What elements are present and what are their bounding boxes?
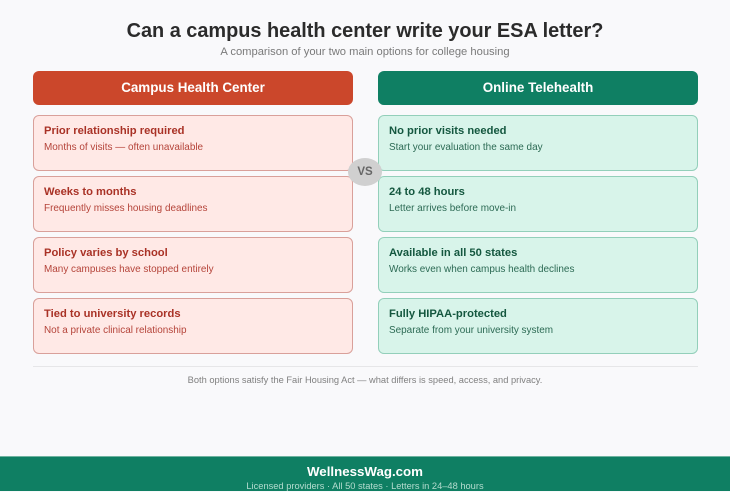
card: weeks to months: Weeks to months: [44, 186, 136, 198]
panel: campus health center: [33, 71, 353, 354]
card: no prior visits: [378, 115, 698, 171]
heading: campus health center: [33, 71, 353, 105]
footnote: Both options satisfy the Fair Housing Act — what differs is speed, access, and privacy.: [188, 375, 542, 385]
title: Can a campus health center write your ESA letter?: [127, 20, 603, 42]
card: all 50 states: [378, 237, 698, 293]
card: 24 to 48 hours: Letter arrives before move-in: [389, 202, 516, 214]
card: university records: Tied to university records: [44, 308, 181, 320]
vs badge: VS: [357, 166, 373, 178]
panel: online telehealth: [378, 71, 698, 354]
subtitle: A comparison of your two main options for college housing: [220, 46, 510, 58]
card: policy varies: [33, 237, 353, 293]
heading: online telehealth: [378, 71, 698, 105]
card: no prior visits: No prior visits needed: [389, 125, 506, 137]
card: all 50 states: Works even when campus health declines: [389, 264, 574, 274]
card: university records: Not a private clinical relationship: [44, 324, 187, 336]
heading: online telehealth: Online Telehealth: [483, 80, 593, 95]
card: prior relationship: Prior relationship required: [44, 125, 184, 137]
card: HIPAA: [378, 298, 698, 354]
card: no prior visits: Start your evaluation the same day: [389, 142, 543, 152]
card: HIPAA: Separate from your university system: [389, 324, 553, 336]
heading: campus health center: Campus Health Center: [121, 80, 265, 95]
card: 24 to 48 hours: 24 to 48 hours: [389, 186, 465, 198]
footer band: [0, 456, 730, 491]
footer tagline: Licensed providers · All 50 states · Letters in 24–48 hours: [246, 480, 484, 490]
card: 24 to 48 hours: [378, 176, 698, 232]
card: university records: [33, 298, 353, 354]
card: prior relationship: Months of visits — often unavailable: [44, 142, 203, 152]
card: policy varies: Policy varies by school: [44, 247, 168, 259]
footer brand: WellnessWag.com: [307, 464, 423, 479]
card: all 50 states: Available in all 50 states: [389, 247, 517, 259]
card: policy varies: Many campuses have stopped entirely: [44, 264, 214, 274]
card: weeks to months: Frequently misses housing deadlines: [44, 202, 208, 214]
card: prior relationship: [33, 115, 353, 171]
card: weeks to months: [33, 176, 353, 232]
vs badge: [348, 158, 382, 186]
card: HIPAA: Fully HIPAA-protected: [389, 308, 507, 320]
